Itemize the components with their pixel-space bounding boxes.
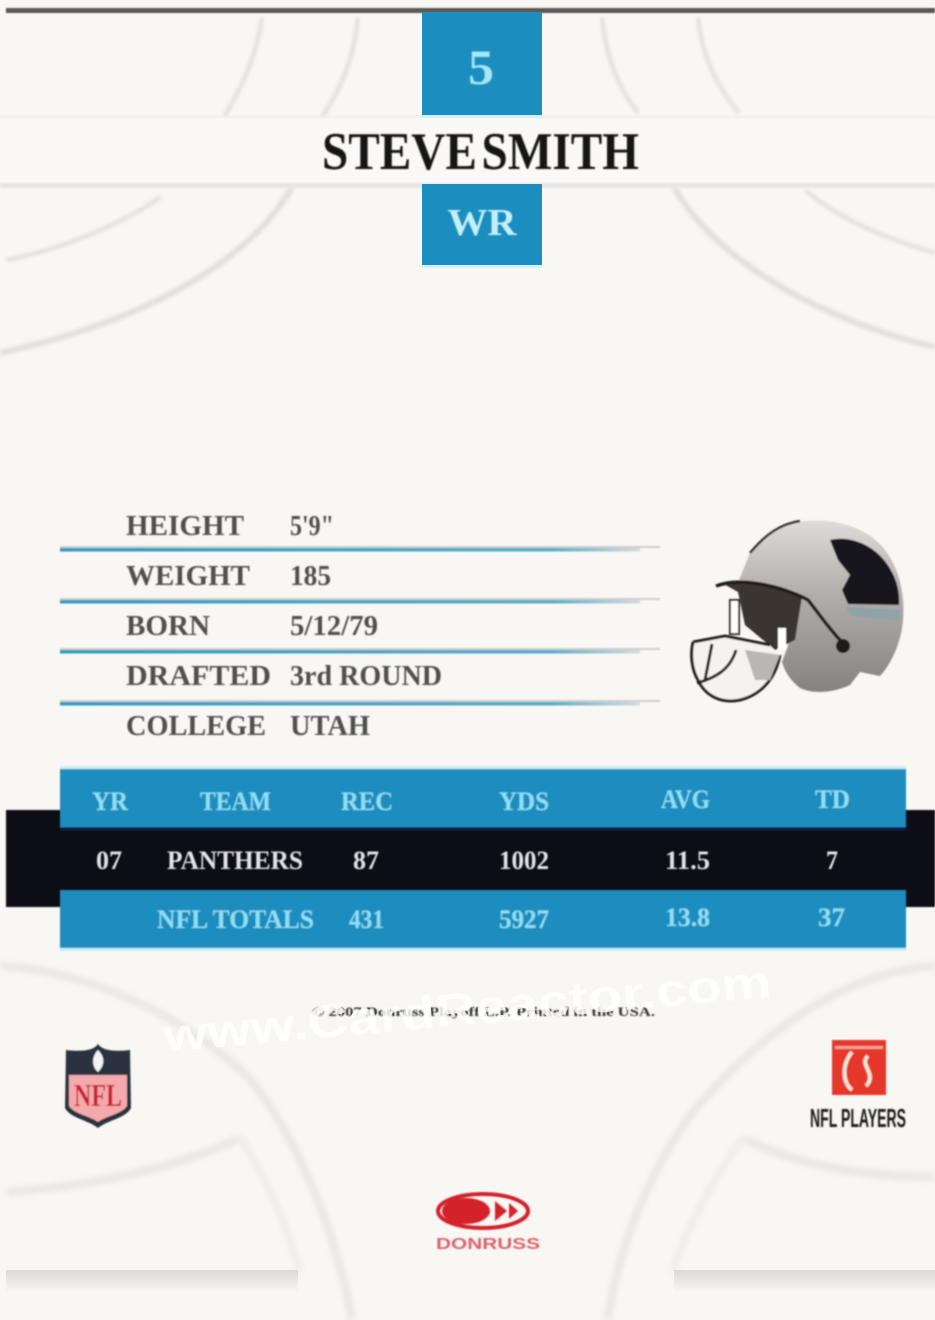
text: 7: [826, 846, 838, 875]
stats table: totals row: 13.8: [665, 903, 710, 932]
copyright line: © 2007 Donruss Playoff L.P. Printed in the USA.: [312, 1004, 655, 1019]
stats band: black row: [6, 810, 935, 907]
icon: NFL shield: [65, 1044, 131, 1128]
stats table: header row: TEAM: [200, 787, 271, 816]
text: PANTHERS: [167, 846, 303, 875]
icon: Donruss logo: [436, 1194, 540, 1253]
stats table: header row: REC: [341, 787, 393, 816]
stats table: header row: [60, 766, 906, 828]
jersey number box: [422, 12, 542, 118]
stats table: header row: YR: [92, 787, 128, 816]
NFL lettering: NFL: [74, 1077, 122, 1113]
player bio: 5'9": [290, 510, 334, 542]
stats table: header row: AVG: [661, 785, 710, 814]
player name: STEVE SMITH: [322, 123, 639, 181]
stats table: totals row: 431: [349, 905, 384, 934]
player bio: HEIGHT: [126, 510, 244, 542]
stats table: totals row: [60, 890, 906, 951]
text: 1002: [499, 846, 549, 875]
top embossed arcs: [0, 17, 935, 353]
bottom embossed arcs: [0, 966, 935, 1320]
bottom band shadows: [6, 1270, 935, 1292]
text: 11.5: [665, 846, 710, 875]
player bio: UTAH: [290, 710, 370, 742]
position: WR: [448, 202, 517, 244]
player bio: BORN: [126, 610, 210, 642]
player bio: [126, 510, 442, 742]
stats table: totals row: 5927: [499, 905, 549, 934]
player bio: DRAFTED: [126, 660, 271, 692]
jersey number: 5: [468, 39, 494, 95]
text: 07: [96, 846, 122, 875]
name band: [0, 116, 935, 188]
stats table: header row: TD: [815, 785, 850, 814]
bio divider rules: [60, 546, 660, 706]
player bio: 185: [290, 560, 331, 592]
text: 87: [353, 846, 379, 875]
Donruss label: DONRUSS: [436, 1236, 540, 1253]
icon: NFL Players logo: [810, 1040, 906, 1133]
player bio: WEIGHT: [126, 560, 250, 592]
stats table: header row: YDS: [499, 787, 549, 816]
stats table: season row: [60, 828, 906, 831]
top dark rule: [6, 8, 935, 13]
watermark: www.CardReactor.com: [160, 955, 773, 1062]
player bio: 3rd ROUND: [290, 660, 442, 692]
stats table: totals row: 37: [818, 903, 845, 932]
stats table: totals row: NFL TOTALS: [157, 905, 314, 934]
icon: panthers helmet: [692, 521, 903, 701]
position box: [422, 184, 542, 268]
player bio: COLLEGE: [126, 710, 266, 742]
player bio: 5/12/79: [290, 610, 378, 642]
